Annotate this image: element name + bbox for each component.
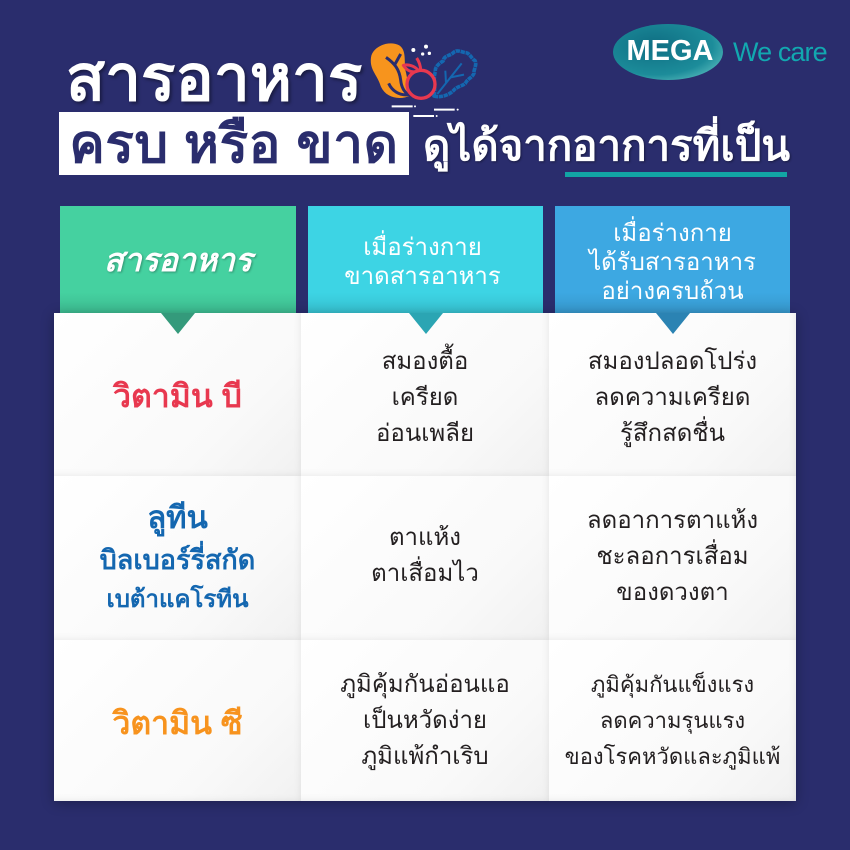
column header: deficient: ขาดสารอาหาร	[344, 263, 501, 290]
pointer: complete	[656, 313, 690, 334]
column header: complete	[555, 206, 790, 314]
sparkle dots	[411, 48, 415, 52]
title: first line: สารอาหาร	[66, 42, 362, 114]
column header: complete: เมื่อร่างกาย	[613, 220, 732, 247]
row 3 complete text: ลดความรุนแรง	[600, 708, 745, 733]
apple	[407, 70, 435, 98]
row 1 deficient text	[376, 344, 474, 447]
nutrient: lutein group: เบต้าแคโรทีน	[106, 586, 249, 613]
column header: nutrient	[60, 206, 296, 314]
row 2 complete text: ชะลอการเสื่อม	[596, 543, 749, 570]
row 1 complete text: ลดความเครียด	[595, 384, 750, 411]
column header: complete: อย่างครบถ้วน	[601, 278, 744, 305]
row 3 deficient text: ภูมิแพ้กำเริบ	[361, 743, 489, 770]
row 2 complete text: ของดวงตา	[616, 579, 729, 606]
row 2 complete text: ลดอาการตาแห้ง	[587, 507, 758, 534]
pointer: deficient	[409, 313, 443, 334]
column header: complete: ได้รับสารอาหาร	[589, 249, 756, 276]
row 2 deficient text	[371, 524, 479, 587]
row 3 complete text: ของโรคหวัดและภูมิแพ้	[565, 744, 780, 769]
logo oval	[613, 24, 723, 80]
pointer: nutrient	[161, 313, 195, 334]
column header: deficient: เมื่อร่างกาย	[363, 234, 482, 261]
row 1 complete text	[588, 347, 757, 448]
row 1 complete text: สมองปลอดโปร่ง	[588, 348, 757, 375]
orange squash	[371, 43, 411, 98]
row 2 deficient text: ตาแห้ง	[389, 524, 461, 551]
row 1 complete text: รู้สึกสดชื่น	[620, 420, 725, 447]
nutrient: lutein group	[100, 500, 255, 613]
row 1 deficient text: เครียด	[392, 384, 458, 411]
lettuce leaf	[434, 51, 476, 97]
column header: deficient	[308, 206, 543, 314]
row 3 deficient text: ภูมิคุ้มกันอ่อนแอ	[340, 671, 510, 698]
column header: nutrient: สารอาหาร	[104, 242, 252, 278]
logo: MEGA We care	[613, 24, 827, 80]
row 3 deficient text: เป็นหวัดง่าย	[363, 707, 487, 734]
nutrient: vitamin B: วิตามิน บี	[113, 378, 242, 414]
logo tagline: We care	[733, 37, 827, 67]
row 2 complete text	[587, 507, 758, 606]
title: second line: ดูได้จากอาการที่เป็น	[423, 122, 790, 169]
table panel	[54, 313, 796, 801]
row 3 complete text: ภูมิคุ้มกันแข็งแรง	[591, 672, 754, 697]
title: highlighted label: ครบ หรือ ขาด	[69, 115, 399, 174]
row 1 deficient text: อ่อนเพลีย	[376, 420, 474, 447]
row 1 deficient text: สมองตื้อ	[382, 348, 468, 375]
motion lines	[392, 106, 455, 116]
nutrient: lutein group: บิลเบอร์รี่สกัด	[100, 545, 255, 575]
row 2 deficient text: ตาเสื่อมไว	[371, 560, 479, 587]
icon: food illustration	[370, 43, 478, 117]
row 3 deficient text	[340, 671, 510, 770]
logo oval: MEGA	[626, 35, 714, 67]
row 3 complete text	[565, 672, 780, 770]
title underline	[565, 172, 787, 177]
nutrient: vitamin C: วิตามิน ซี	[112, 705, 243, 741]
nutrient: lutein group: ลูทีน	[147, 500, 208, 535]
